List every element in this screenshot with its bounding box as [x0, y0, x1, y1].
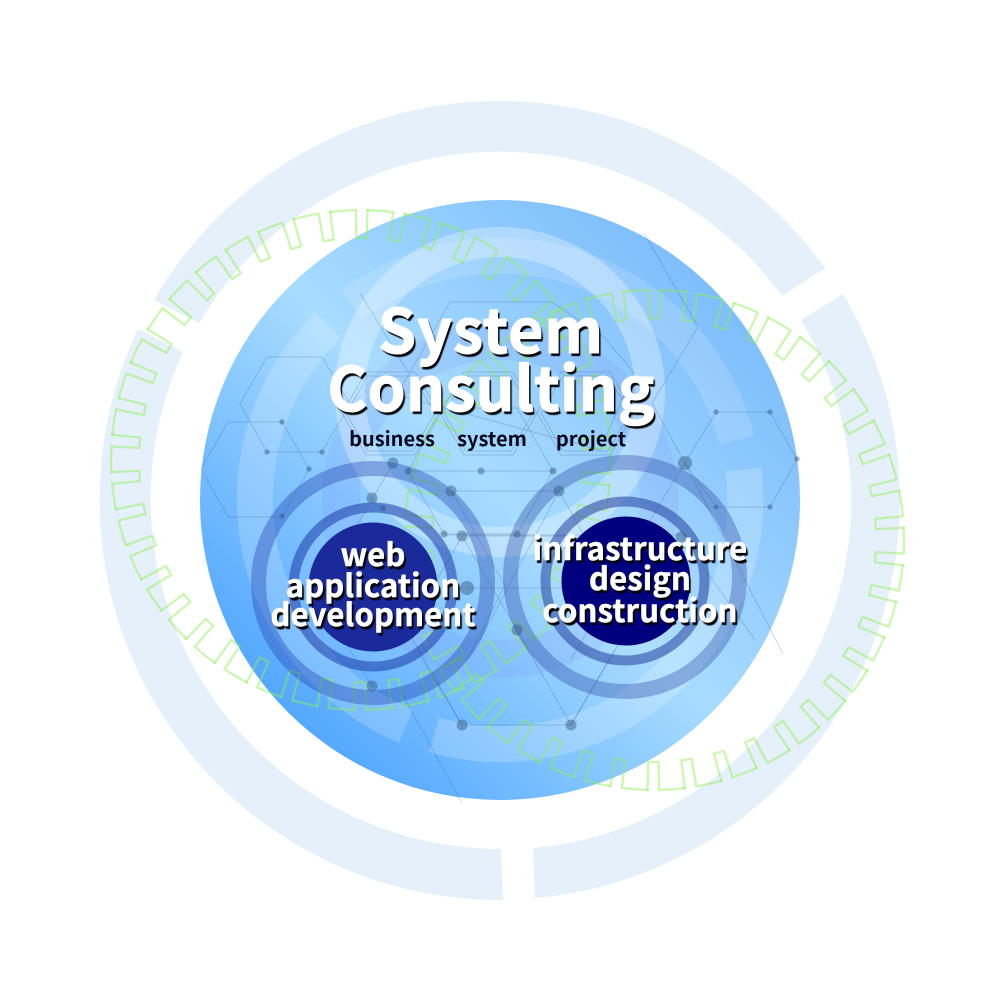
keyword: business: business — [349, 423, 435, 452]
band: left arc — [255, 325, 406, 726]
left inner ring — [294, 508, 452, 666]
navy disc: web application development — [308, 522, 438, 652]
gear: upper left — [71, 146, 682, 773]
lavender inner ring — [341, 341, 659, 659]
right concentric rings — [510, 462, 740, 692]
gear: lower right — [364, 226, 975, 853]
label line: construction: construction — [542, 586, 738, 631]
outer ring: left arc — [100, 329, 503, 900]
pale ring behind the title — [350, 242, 650, 542]
label line: web: web — [341, 530, 405, 575]
band: bottom arc — [434, 470, 745, 744]
label line: design: design — [589, 554, 691, 599]
network lines — [201, 233, 797, 803]
title line: System: System — [378, 282, 604, 371]
label line: development: development — [270, 590, 476, 635]
right outer ring — [510, 462, 740, 692]
label line: application: application — [286, 561, 460, 606]
green gear outlines — [71, 146, 975, 853]
title line: Consulting: Consulting — [327, 340, 655, 429]
keyword: system: system — [457, 423, 527, 452]
right inner ring — [546, 502, 704, 660]
label line: infrastructure: infrastructure — [533, 524, 747, 569]
network nodes — [264, 409, 800, 730]
main blue disc — [200, 200, 800, 800]
subtitle keywords — [349, 423, 626, 452]
hexagon network — [201, 233, 800, 803]
left outer ring — [258, 468, 488, 698]
title — [327, 282, 656, 430]
outer segmented ring — [100, 101, 900, 900]
translucent bands inside disc — [255, 242, 745, 744]
navy disc: infrastructure design construction — [562, 516, 690, 646]
outer ring: top arc — [154, 101, 825, 323]
band: upper right arc — [352, 256, 737, 440]
left concentric rings — [258, 468, 488, 698]
outer ring: right arc — [533, 294, 900, 898]
label: web application development — [270, 530, 478, 636]
keyword: project: project — [556, 423, 626, 452]
label: infrastructure design construction — [533, 524, 748, 631]
